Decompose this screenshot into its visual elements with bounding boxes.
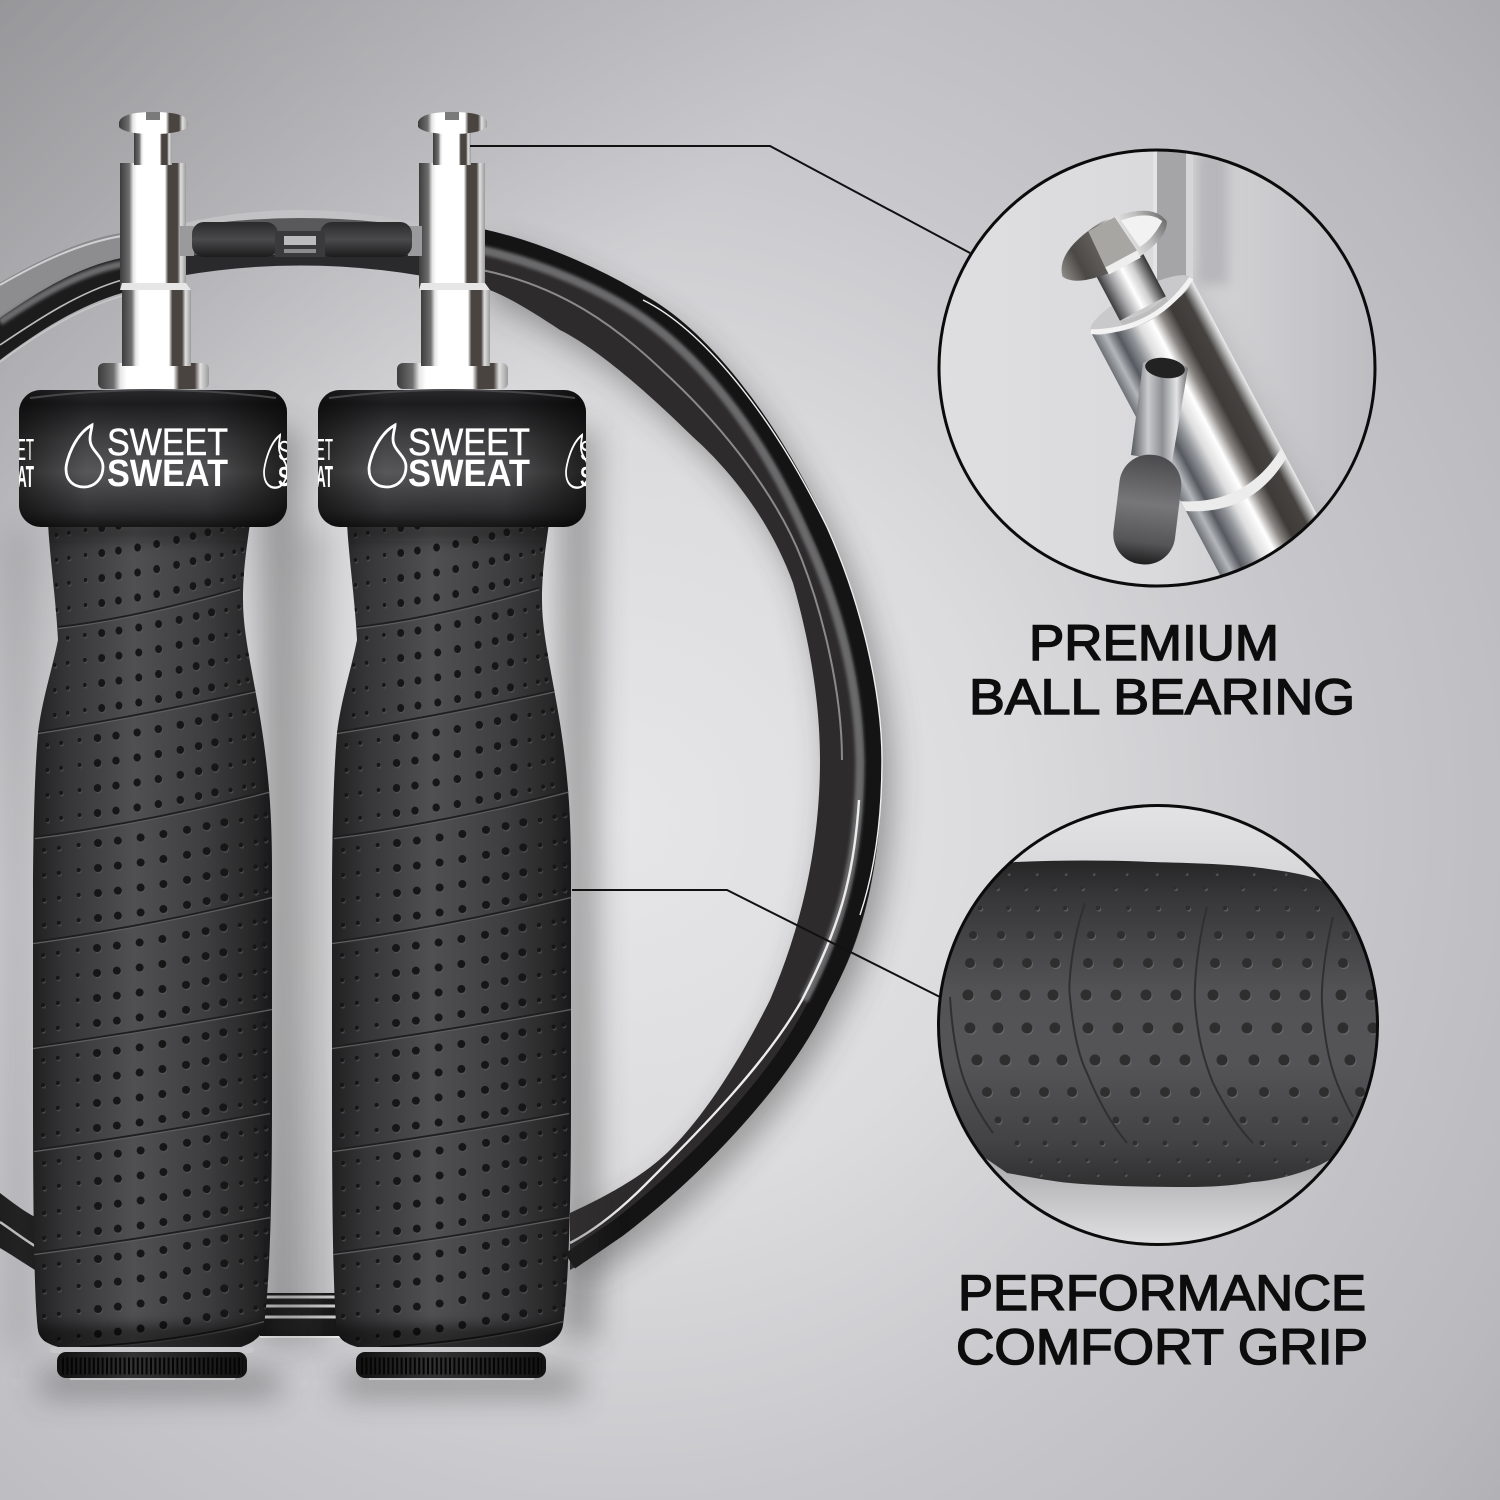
logo collar: SW bbox=[580, 435, 610, 466]
logo collar: SW bbox=[278, 461, 308, 492]
swivel pin bbox=[98, 112, 209, 389]
cable ferrule between pins bbox=[180, 222, 422, 257]
enlarged grip surface bbox=[940, 860, 1376, 1187]
textured grip bbox=[30, 499, 275, 1355]
heading: premium ball bearing: PREMIUM bbox=[1029, 615, 1279, 671]
logo collar: SW bbox=[580, 461, 610, 492]
logo collar bbox=[316, 390, 610, 527]
logo collar: ET bbox=[316, 432, 333, 467]
circle callout: ball bearing detail bbox=[938, 148, 1376, 588]
logo collar: SW bbox=[278, 435, 308, 466]
handle: left bbox=[6, 112, 308, 1394]
leader line: grip bbox=[572, 890, 940, 997]
knurled end cap bbox=[50, 1347, 254, 1379]
leader line: ball bearing bbox=[470, 146, 970, 253]
logo collar: SWEET bbox=[408, 422, 530, 464]
logo collar bbox=[17, 390, 308, 527]
logo collar: AT bbox=[316, 459, 333, 494]
logo collar: AT bbox=[17, 459, 34, 494]
logo collar: SWEET bbox=[107, 422, 228, 464]
jump rope cable bbox=[0, 210, 892, 1338]
logo collar: SWEAT bbox=[107, 453, 228, 495]
handle: right bbox=[296, 112, 610, 1394]
heading: premium ball bearing: BALL BEARING bbox=[969, 669, 1355, 725]
logo collar: ET bbox=[17, 432, 34, 467]
circle callout: grip detail bbox=[930, 800, 1401, 1250]
textured grip bbox=[329, 499, 574, 1355]
knurled end cap bbox=[349, 1347, 553, 1379]
heading: performance comfort grip: PERFORMANCE bbox=[958, 1265, 1366, 1321]
cable segment left of pin bbox=[0, 233, 122, 362]
swivel pin bbox=[397, 112, 508, 389]
ball bearing swivel bbox=[1062, 210, 1317, 575]
heading: performance comfort grip: COMFORT GRIP bbox=[956, 1319, 1368, 1375]
heading: performance comfort grip bbox=[956, 1265, 1368, 1375]
logo collar: SWEAT bbox=[408, 453, 530, 495]
heading: premium ball bearing bbox=[969, 615, 1355, 725]
